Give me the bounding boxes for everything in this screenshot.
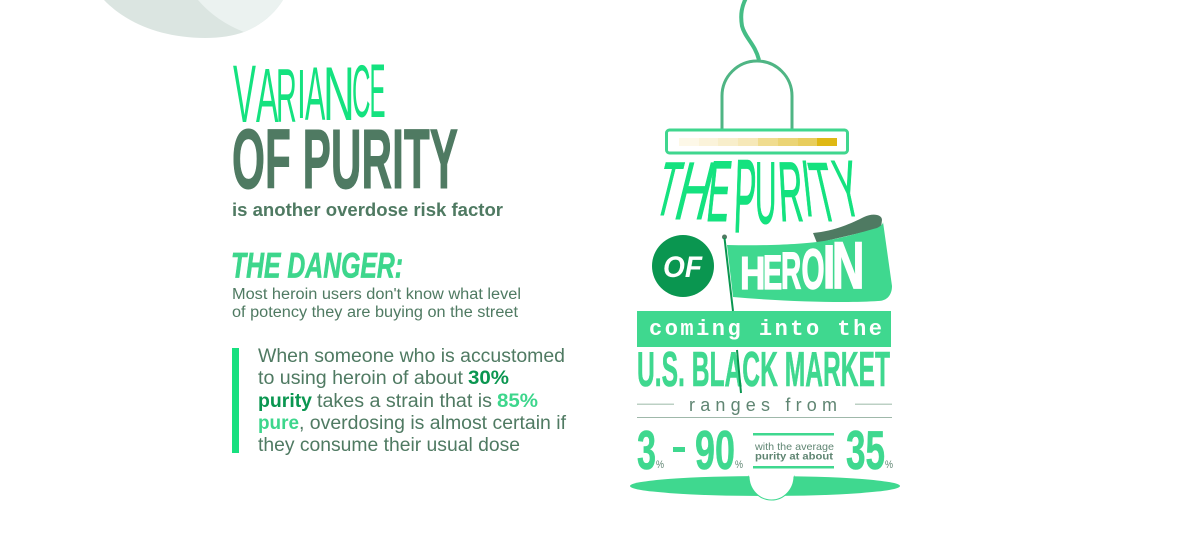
average caption: with the average xyxy=(754,441,834,453)
heading line: variance: R xyxy=(276,55,297,139)
icon: syringe-shaped bottle top xyxy=(666,0,848,153)
percent sign: % xyxy=(656,459,664,471)
heading line: of purity: OF PURITY xyxy=(232,112,458,206)
purity bar frame xyxy=(666,130,848,153)
callout text: purity xyxy=(258,391,312,412)
title: the purity: U xyxy=(755,144,776,242)
title: the purity: E xyxy=(703,142,736,239)
heading: u.s. black market: U.S. BLACK MARKET xyxy=(637,343,890,397)
average caption xyxy=(753,433,834,468)
the danger block xyxy=(231,246,525,321)
flag word: E xyxy=(763,247,782,300)
dash xyxy=(673,447,685,452)
title: the purity: T xyxy=(648,146,690,231)
banner: coming into the xyxy=(637,311,891,347)
percent sign: % xyxy=(735,459,743,471)
average caption: purity at about xyxy=(755,450,834,462)
ranges from row: ranges from xyxy=(689,395,837,415)
purity gradient bar xyxy=(679,138,837,146)
title: the purity: Y xyxy=(827,144,868,234)
decorative corner circle xyxy=(104,0,283,38)
flag fold xyxy=(813,215,882,243)
stats row xyxy=(637,419,893,481)
flag: heroin xyxy=(727,215,892,302)
heading: variance of purity xyxy=(232,48,503,220)
callout text: 85% xyxy=(497,391,538,412)
heading line: variance: V xyxy=(233,49,256,140)
callout: overdose scenario xyxy=(232,346,571,456)
danger description: Most heroin users don't know what level xyxy=(232,286,521,303)
heading line: variance: E xyxy=(370,48,386,133)
flag word xyxy=(740,228,864,302)
callout accent bar xyxy=(232,348,239,453)
badge: of xyxy=(652,235,714,297)
flag word: N xyxy=(832,228,864,302)
callout text: 30% xyxy=(468,368,509,389)
title: the purity: I xyxy=(798,144,816,233)
title: the purity: P xyxy=(732,139,758,255)
stat: average: 35 xyxy=(846,419,885,481)
callout text: pure xyxy=(258,413,299,434)
heading line: variance: A xyxy=(305,53,325,137)
flag body xyxy=(727,222,892,302)
heading line: variance: C xyxy=(352,50,370,133)
heading line: variance: I xyxy=(297,56,306,133)
heading line: variance: A xyxy=(256,52,279,139)
stat: range low: 3 xyxy=(637,419,656,481)
callout text: takes a strain that is xyxy=(317,391,492,412)
percent sign: % xyxy=(885,459,893,471)
danger heading: THE DANGER: xyxy=(231,246,403,286)
title: the purity: T xyxy=(803,145,845,239)
callout text: they consume their usual dose xyxy=(258,435,520,456)
subheading: is another overdose risk factor xyxy=(232,200,503,220)
badge: of: OF xyxy=(663,251,703,284)
heading line: variance xyxy=(233,48,386,140)
callout text: , overdosing is almost certain if xyxy=(299,413,567,434)
flag word: R xyxy=(781,241,801,300)
banner: coming into the: coming into the xyxy=(649,317,882,342)
flag pole xyxy=(722,234,741,393)
flag word: I xyxy=(823,234,835,302)
bottle base and plunger xyxy=(630,475,900,500)
title: the purity: R xyxy=(776,145,805,239)
stat: range high: 90 xyxy=(695,419,735,481)
wire xyxy=(741,0,759,60)
dome xyxy=(722,61,792,130)
flag word: O xyxy=(802,237,825,301)
danger description: of potency they are buying on the street xyxy=(232,304,519,321)
heading line: variance: N xyxy=(323,53,355,137)
title: the purity xyxy=(648,139,868,255)
callout text: When someone who is accustomed xyxy=(258,346,565,367)
title: the purity: H xyxy=(667,147,723,237)
callout text: to using heroin of about xyxy=(258,368,464,389)
flag word: H xyxy=(740,247,765,299)
